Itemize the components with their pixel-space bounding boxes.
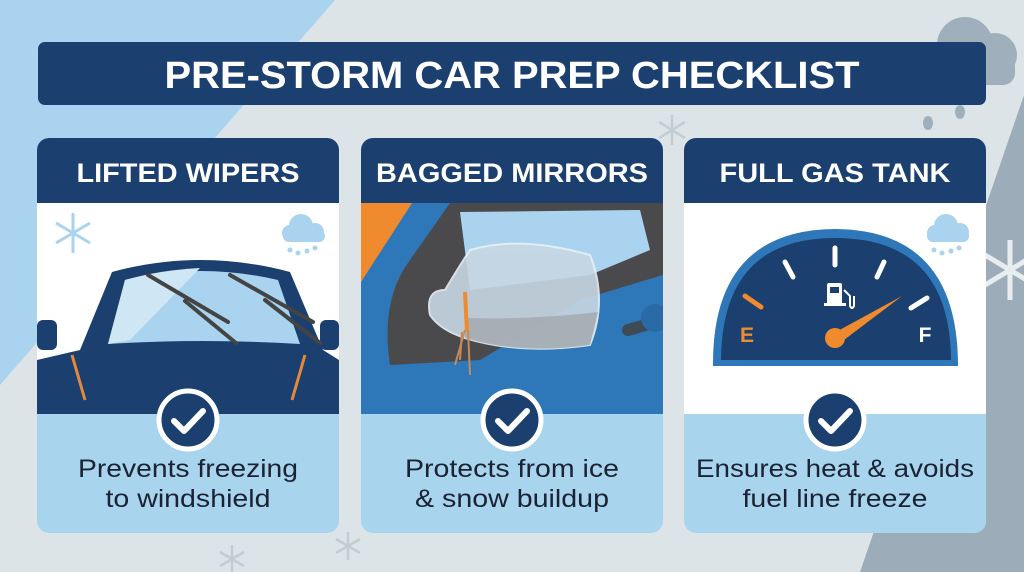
body text: Protects from ice xyxy=(405,455,619,483)
icon: check xyxy=(483,391,541,449)
icon: rain cloud xyxy=(282,214,325,256)
icon: background snowflakes xyxy=(220,115,1024,572)
icon: rain cloud xyxy=(927,214,969,256)
icon: background storm cloud xyxy=(915,17,1017,130)
header text: LIFTED WIPERS xyxy=(76,158,300,188)
illustration: car door with bagged mirror xyxy=(361,203,669,414)
body text: Ensures heat & avoids xyxy=(696,455,974,483)
panel: bagged mirrors: & snow buildup xyxy=(415,485,609,513)
illustration: car with lifted wipers xyxy=(37,260,339,414)
panel: bagged mirrors xyxy=(361,138,669,533)
panel: lifted wipers: to windshield xyxy=(106,485,270,513)
gauge xyxy=(713,229,958,366)
panel: lifted wipers xyxy=(37,138,339,533)
header text: FULL GAS TANK xyxy=(720,158,951,188)
header text: BAGGED MIRRORS xyxy=(376,158,648,188)
title banner: PRE-STORM CAR PREP CHECKLIST xyxy=(164,55,860,97)
panel: full gas tank xyxy=(684,138,986,533)
icon: fuel pump xyxy=(824,283,854,308)
body text: Prevents freezing xyxy=(78,455,298,483)
gauge: E xyxy=(740,324,754,347)
icon: check xyxy=(806,391,864,449)
icon: snowflake xyxy=(56,213,90,253)
gauge: F xyxy=(919,324,932,347)
panel: full gas tank: fuel line freeze xyxy=(742,485,928,513)
title banner xyxy=(38,42,986,105)
icon: check xyxy=(159,391,217,449)
